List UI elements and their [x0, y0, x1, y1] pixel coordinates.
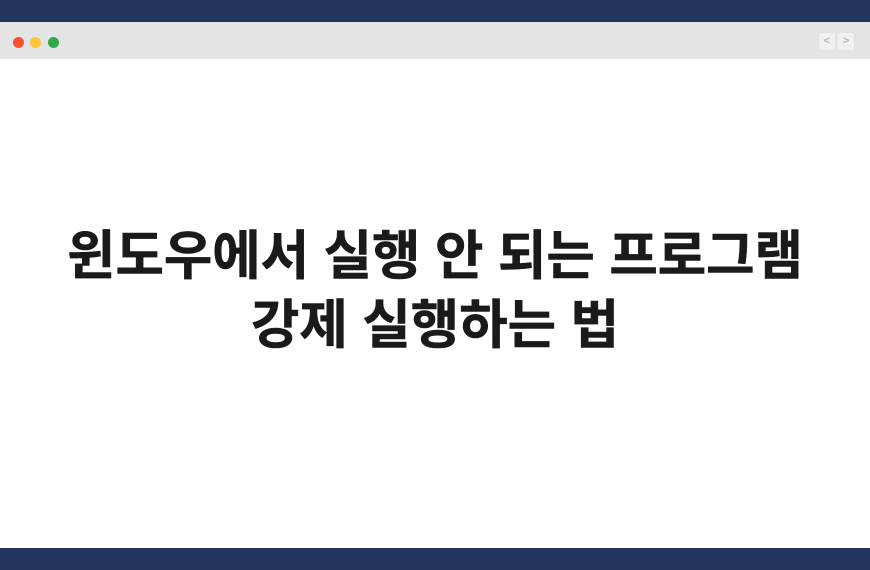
- icon: back button: <: [824, 35, 830, 47]
- icon: forward button: [838, 33, 854, 50]
- title: 강제 실행하는 법: [251, 296, 619, 355]
- title: 윈도우에서 실행 안 되는 프로그램: [67, 227, 803, 286]
- top navy bar: [0, 0, 870, 22]
- icon: green window dot: [48, 37, 59, 48]
- icon: back button: [819, 33, 835, 50]
- icon: forward button: >: [843, 35, 849, 47]
- title: [67, 227, 803, 355]
- icon: red window dot: [13, 37, 24, 48]
- browser toolbar: [0, 22, 870, 59]
- bottom navy bar: [0, 548, 870, 570]
- icon: yellow window dot: [30, 37, 41, 48]
